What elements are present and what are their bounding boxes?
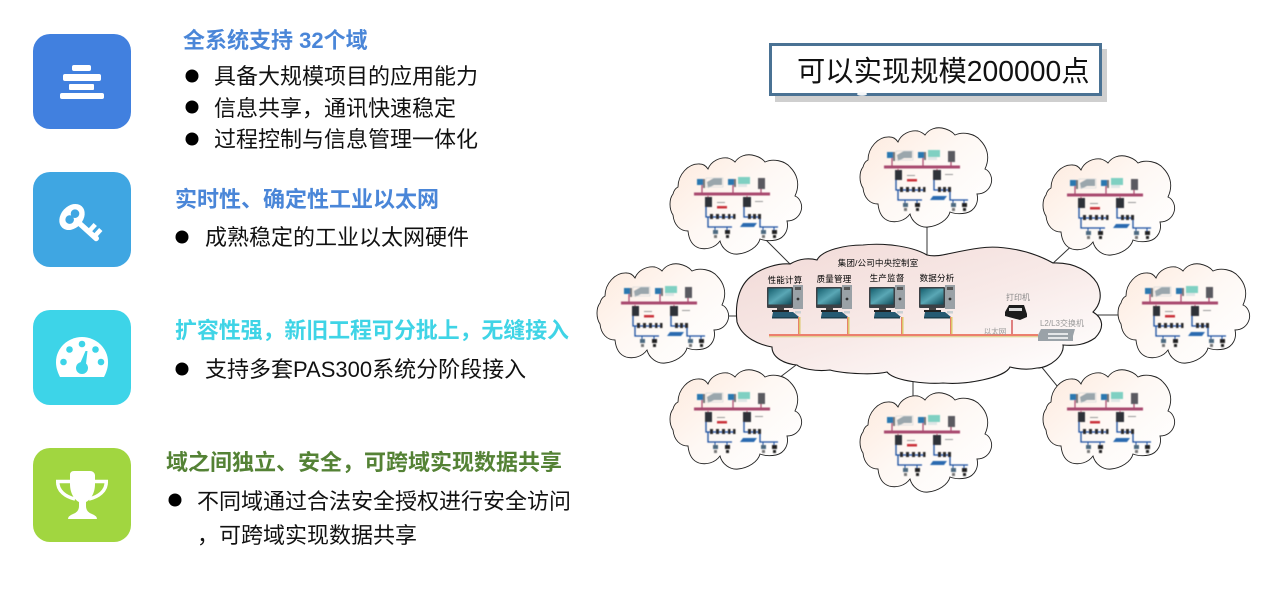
heading: expandability: 扩容性强，新旧工程可分批上，无缝接入 xyxy=(175,318,569,343)
cloud: top-left domain xyxy=(670,155,802,254)
printer: 打印机 xyxy=(1006,292,1030,302)
cloud: bottom-left domain xyxy=(670,370,802,469)
label: control room: 集团/公司中央控制室 xyxy=(838,257,919,268)
cloud: right domain xyxy=(1118,264,1250,363)
bullet list: domain capabilities: 信息共享，通讯快速稳定 xyxy=(214,96,456,121)
icon tile: blue stacked bars xyxy=(33,34,131,129)
labels: workstations xyxy=(768,273,955,285)
cloud: bottom-right domain xyxy=(1043,370,1175,469)
workstations xyxy=(767,285,955,318)
title box: scale 200000 points: 可以实现规模200000点 xyxy=(797,55,1090,87)
central cloud: group control room xyxy=(736,244,1102,383)
heading: domain isolation: 域之间独立、安全，可跨域实现数据共享 xyxy=(166,450,562,475)
icon tile: trophy xyxy=(33,448,131,542)
ethernet bus xyxy=(769,317,1038,337)
labels: workstations: 生产监督 xyxy=(870,273,905,283)
bullet: secure cross-domain access: ，可跨域实现数据共享 xyxy=(197,523,417,548)
cloud: left domain xyxy=(597,264,729,363)
bullet: mature hardware: 成熟稳定的工业以太网硬件 xyxy=(205,225,469,250)
icon tile: gauge xyxy=(33,310,131,405)
bullet: secure cross-domain access xyxy=(168,489,571,548)
cloud: top-centre domain xyxy=(860,128,992,227)
heading: 32 domains: 全系统支持 32个域 xyxy=(183,28,368,53)
bullet list: domain capabilities: 具备大规模项目的应用能力 xyxy=(214,64,478,89)
switch: L2/L3交换机 xyxy=(1040,318,1084,328)
cloud: bottom-centre domain xyxy=(860,393,992,492)
bullet: secure cross-domain access: 不同域通过合法安全授权进行安全访问 xyxy=(197,489,571,514)
printer xyxy=(1005,292,1030,320)
labels: workstations: 质量管理 xyxy=(817,274,852,284)
bullet: phased access: 支持多套PAS300系统分阶段接入 xyxy=(205,357,526,382)
bullet list: domain capabilities xyxy=(186,64,478,152)
label: ethernet: 以太网 xyxy=(984,326,1006,336)
icon tile: key xyxy=(33,172,131,267)
title box: scale 200000 points xyxy=(770,44,1107,102)
bullet list: domain capabilities: 过程控制与信息管理一体化 xyxy=(214,127,478,152)
network connection lines xyxy=(720,215,1125,402)
labels: workstations: 数据分析 xyxy=(920,273,955,283)
cloud: top-right domain xyxy=(1043,156,1175,255)
heading: real-time ethernet: 实时性、确定性工业以太网 xyxy=(175,187,439,212)
switch xyxy=(1038,318,1084,341)
labels: workstations: 性能计算 xyxy=(768,275,803,285)
